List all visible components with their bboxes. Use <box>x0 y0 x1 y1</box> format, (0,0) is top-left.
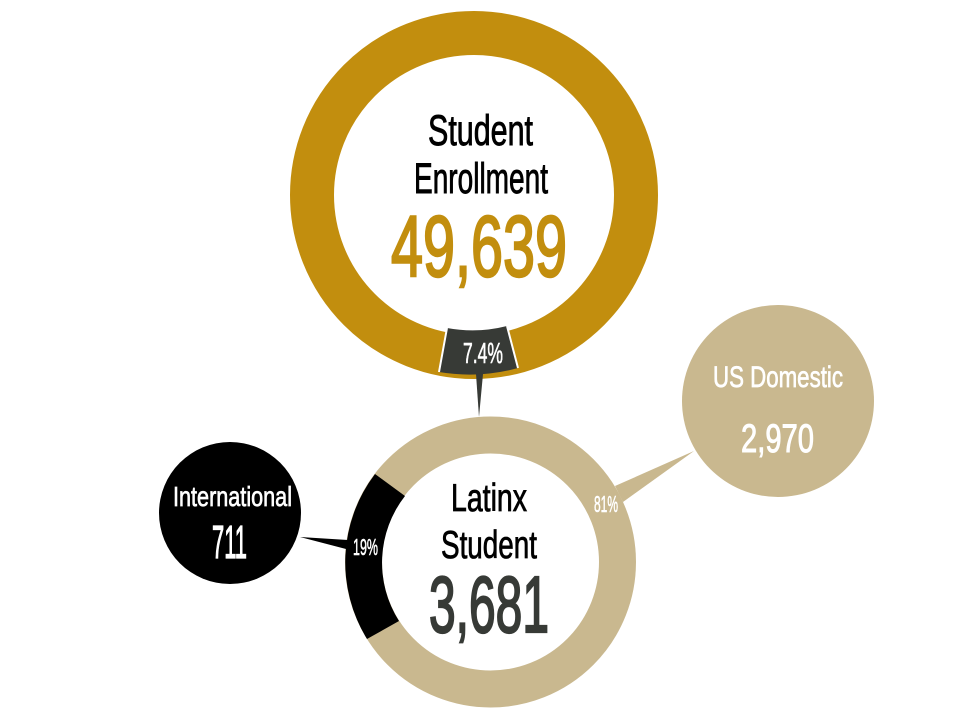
pointer to US domestic <box>615 451 694 502</box>
heading: student enrollment: Student <box>428 107 533 155</box>
enrollment total: 49,639 <box>391 199 567 295</box>
panel: international bubble: 711 <box>212 516 247 568</box>
panel: student enrollment donut <box>312 33 636 417</box>
panel: international bubble <box>159 442 301 584</box>
heading: latinx student: Latinx <box>451 477 527 520</box>
tan ring <box>364 435 618 689</box>
US domestic label: US Domestic <box>713 361 843 394</box>
heading: latinx student: Student <box>441 524 537 567</box>
dark 7.4% segment <box>439 326 518 375</box>
heading: student enrollment: Enrollment <box>414 155 548 203</box>
black circle <box>159 442 301 584</box>
81% label: 81% <box>594 491 618 517</box>
pointer to Latinx donut <box>476 374 483 417</box>
tan circle <box>682 305 874 497</box>
panel: US domestic bubble <box>682 305 874 497</box>
share label: 7.4% <box>463 338 503 370</box>
black 19% segment <box>345 474 405 639</box>
gold ring <box>312 33 636 357</box>
latinx total: 3,681 <box>429 560 549 649</box>
pointer to international <box>300 537 348 549</box>
US domestic value: 2,970 <box>741 417 814 461</box>
panel: latinx student donut <box>300 435 694 689</box>
19% label: 19% <box>353 534 378 560</box>
heading: latinx student <box>441 477 537 567</box>
heading: student enrollment <box>414 107 548 203</box>
international label: International <box>173 481 292 512</box>
